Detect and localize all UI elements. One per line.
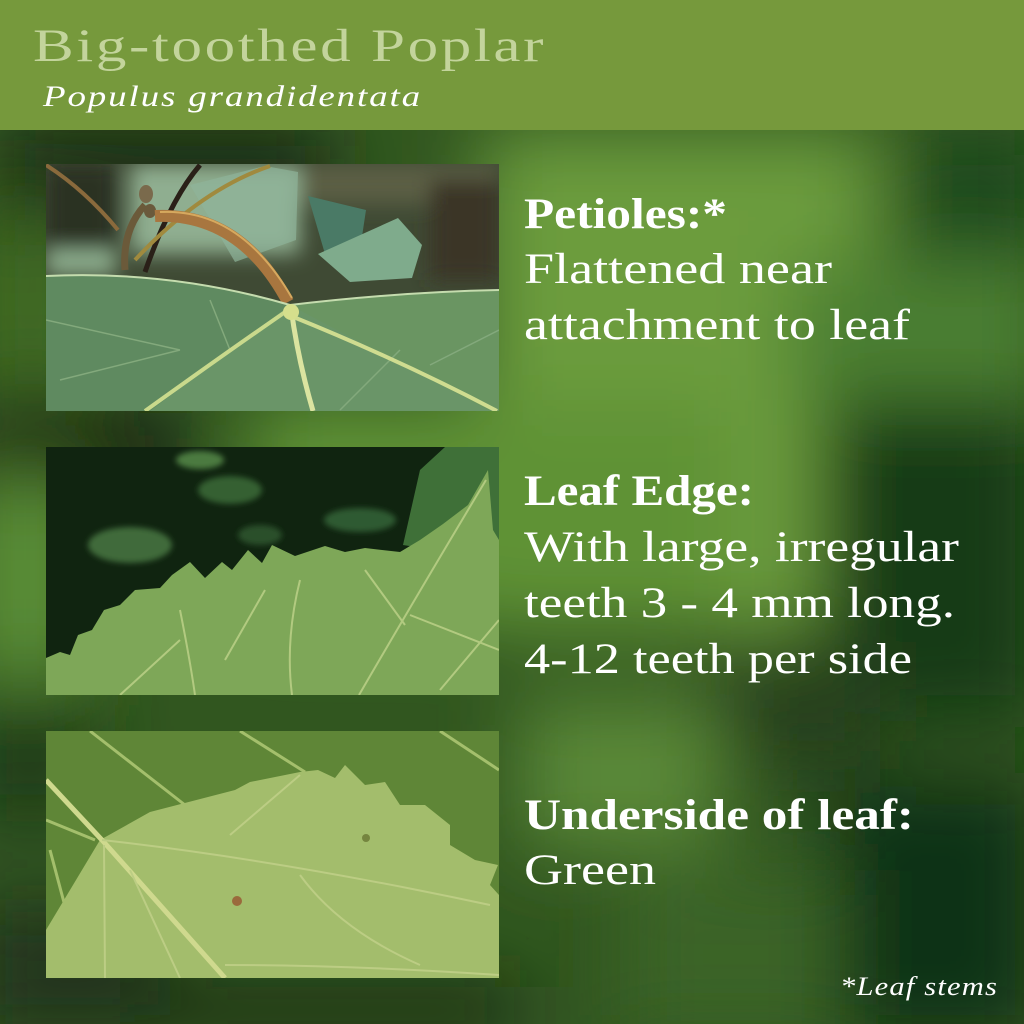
- caption: petioles: Flattened near: [524, 246, 832, 293]
- caption: underside of leaf: [524, 792, 914, 894]
- caption: leaf edge: teeth 3 - 4 mm long.: [524, 580, 955, 627]
- photo: leaf edge: [46, 447, 499, 695]
- petiole stem: [155, 216, 288, 302]
- caption: underside of leaf: Green: [524, 847, 656, 894]
- header band: [0, 0, 1024, 130]
- pale leaf: [46, 765, 499, 978]
- caption: leaf edge: [524, 468, 959, 683]
- caption: petioles: [524, 191, 911, 349]
- scientific name: Populus grandidentata: [42, 80, 422, 113]
- caption: petioles: Petioles:*: [524, 191, 727, 238]
- photo: petiole attachment: [46, 164, 499, 411]
- caption: leaf edge: 4-12 teeth per side: [524, 636, 912, 683]
- leaf blades: [150, 310, 490, 411]
- footnote: *Leaf stems: [840, 972, 998, 1001]
- caption: leaf edge: Leaf Edge:: [524, 468, 754, 515]
- title: Big-toothed Poplar: [33, 20, 546, 72]
- caption: underside of leaf: Underside of leaf:: [524, 792, 914, 839]
- photo: underside of leaf: [46, 731, 499, 978]
- caption: leaf edge: With large, irregular: [524, 524, 959, 571]
- serrated leaf: [46, 470, 499, 695]
- caption: petioles: attachment to leaf: [524, 302, 911, 349]
